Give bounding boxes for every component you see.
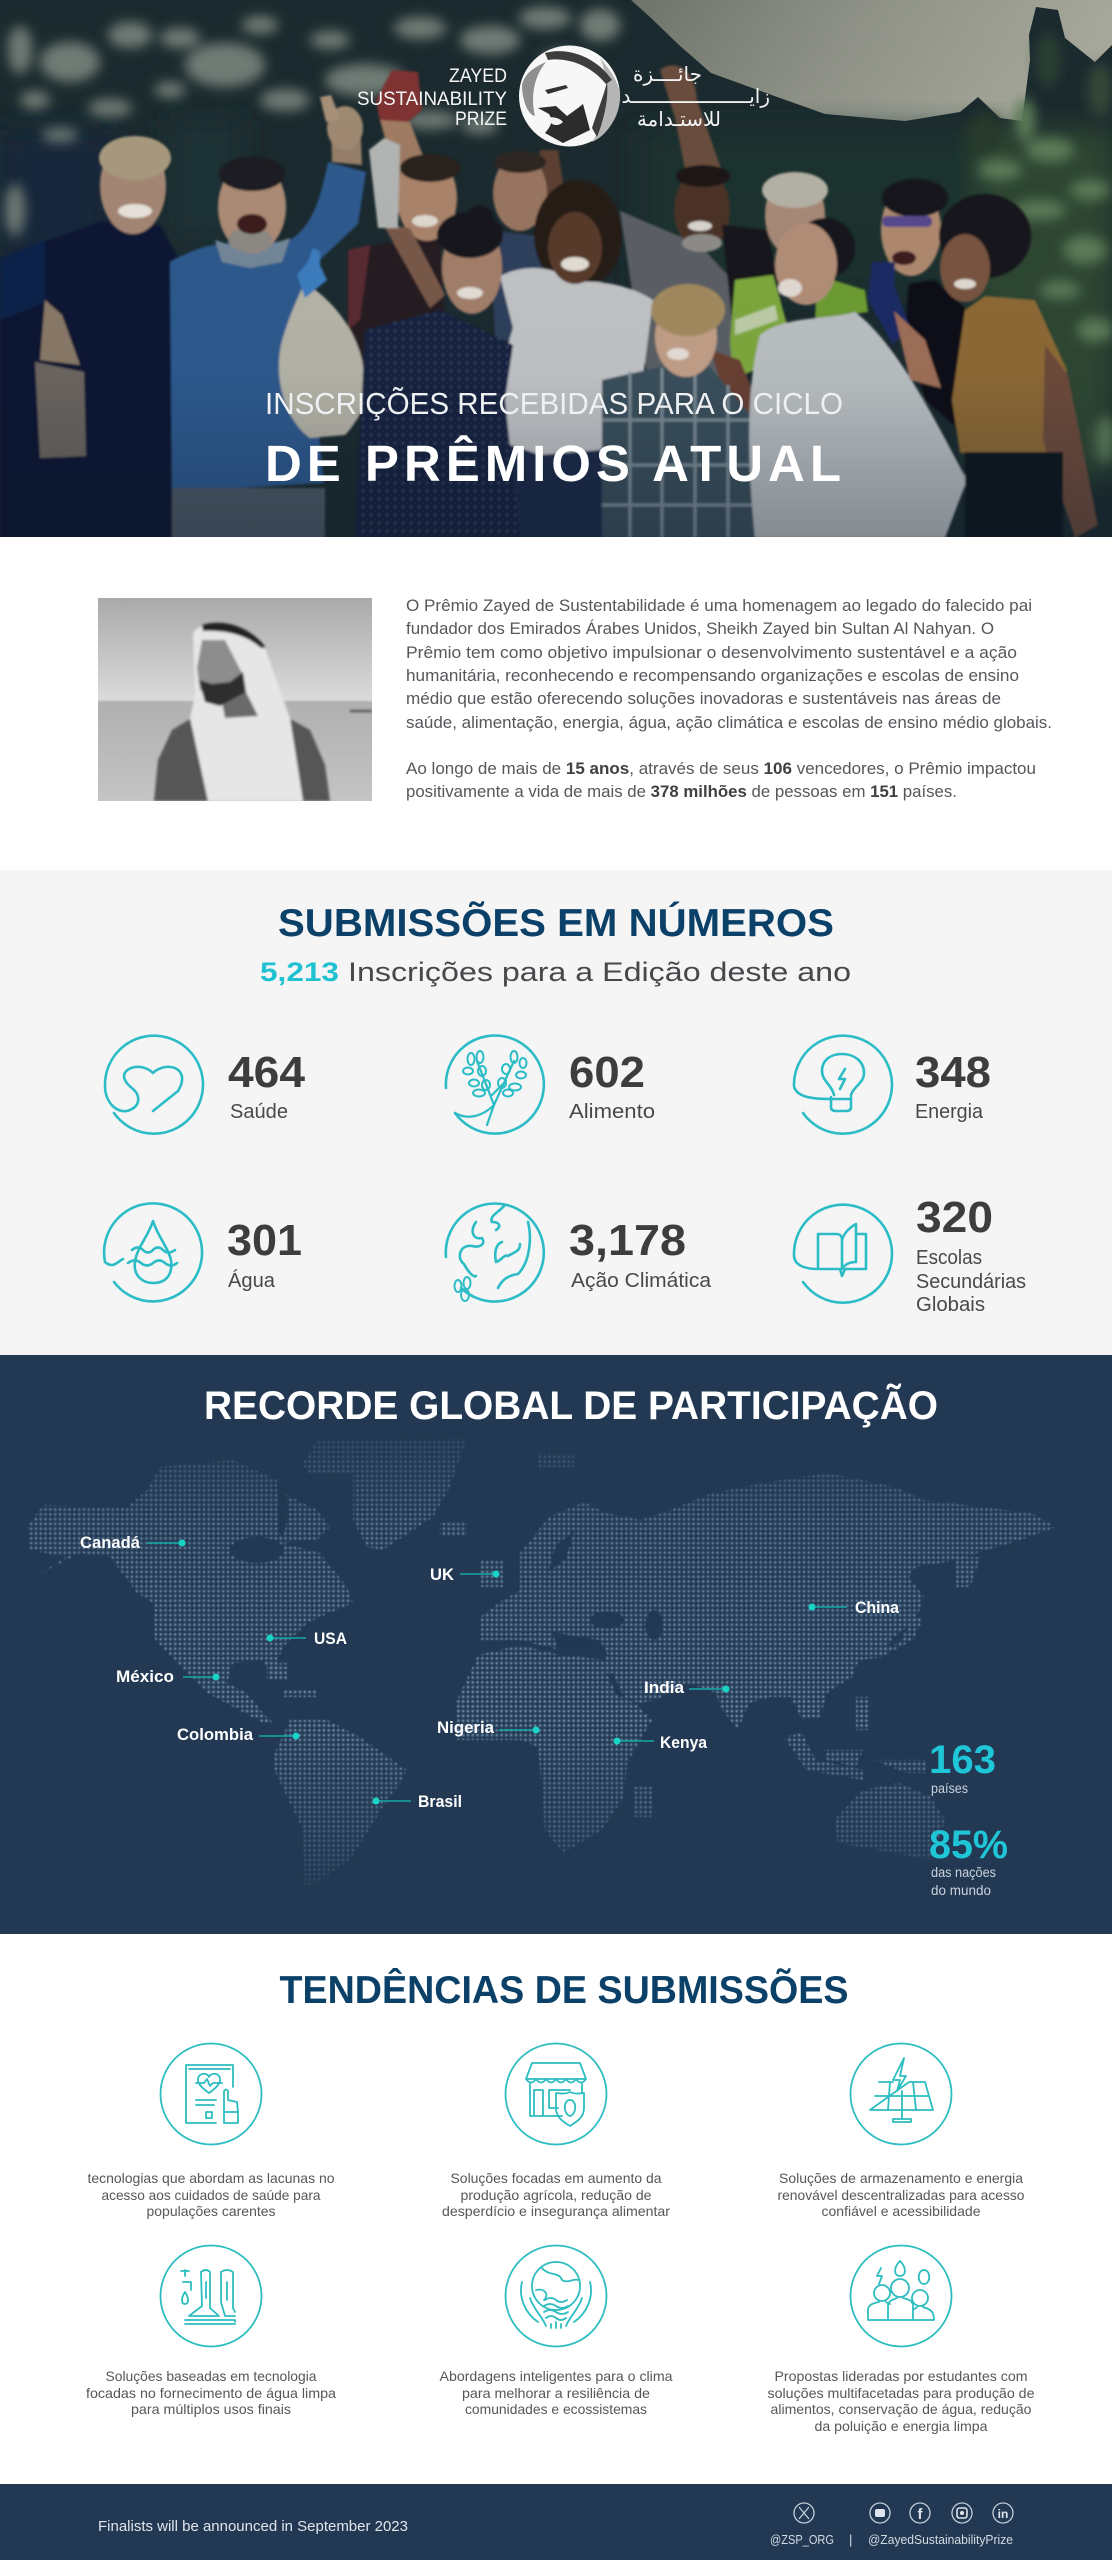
intro text	[406, 597, 1052, 801]
caption: Soluções de armazenamento e energia	[779, 2170, 1023, 2186]
woman laughing with bag	[749, 312, 967, 538]
caption: Soluções baseadas em tecnologia	[106, 2368, 317, 2384]
caption: acesso aos cuidados de saúde para	[102, 2187, 321, 2203]
heading: RECORDE GLOBAL DE PARTICIPAÇÃO	[204, 1382, 938, 1428]
social handles	[770, 2532, 1013, 2547]
intro text: saúde, alimentação, energia, água, ação climática e escolas de ensino médio globais.	[406, 714, 1052, 732]
icon: Facebook	[910, 2503, 930, 2523]
intro text: Prêmio tem como objetivo impulsionar o desenvolvimento sustentável e a ação	[406, 644, 1017, 662]
logo wordmark arabic: للاستـدامة	[637, 107, 721, 131]
trend: high schools	[768, 2246, 1035, 2434]
trend: health tech	[88, 2044, 335, 2219]
stat: 163 countries: 163	[929, 1738, 996, 1782]
stat: water: Água	[228, 1269, 276, 1292]
intro text: Ao longo de mais de 15 anos, através de seus 106 vencedores, o Prêmio impactou	[406, 760, 1036, 778]
icon: water drop	[104, 1203, 202, 1301]
stat: 85% of nations: do mundo	[931, 1883, 991, 1898]
hero title: INSCRIÇÕES RECEBIDAS PARA O CICLO	[265, 386, 843, 421]
logo portrait medallion	[519, 46, 620, 146]
country markers and labels: USA	[314, 1629, 347, 1648]
raised-arm men on the left	[906, 279, 966, 426]
subtitle total: Inscrições para a Edição deste ano	[348, 957, 851, 987]
logo wordmark arabic: زايــــــــــــــــــــد	[622, 84, 770, 108]
stat: climate action	[569, 1216, 712, 1292]
caption: para melhorar a resiliência de	[462, 2385, 650, 2401]
trend: clean water	[86, 2246, 336, 2417]
country markers and labels: Kenya	[660, 1733, 707, 1752]
icon: YouTube	[870, 2503, 890, 2523]
caption: populações carentes	[146, 2203, 276, 2219]
icon: LinkedIn: in	[998, 2507, 1008, 2521]
icon: climate globe	[446, 1204, 544, 1302]
stat: health: 464	[228, 1048, 306, 1097]
stat: energy: 348	[915, 1048, 991, 1097]
panel: submissions in numbers	[0, 870, 1112, 1356]
country markers and labels: India	[644, 1678, 685, 1697]
stat: global secondary schools	[916, 1193, 1026, 1316]
caption: soluções multifacetadas para produção de	[768, 2385, 1035, 2401]
caption	[778, 2170, 1025, 2219]
heading: submission trends: TENDÊNCIAS DE SUBMISSÕES	[280, 1968, 848, 2012]
intro text: humanitária, reconhecendo e recompensando organizações e escolas de ensino	[406, 667, 1019, 685]
caption	[440, 2368, 673, 2417]
stat: food: 602	[569, 1048, 645, 1097]
country markers and labels: México	[116, 1667, 174, 1686]
logo wordmark english	[357, 66, 507, 130]
caption: alimentos, conservação de água, redução	[770, 2401, 1032, 2417]
subtitle total: 5,213	[260, 957, 339, 987]
logo wordmark arabic: جائــــزة	[633, 62, 702, 86]
caption: focadas no fornecimento de água limpa	[86, 2385, 336, 2401]
icon: health heart	[105, 1036, 203, 1134]
logo: Zayed Sustainability Prize	[357, 46, 770, 146]
icon: tablet heart	[160, 2044, 262, 2144]
caption	[442, 2170, 670, 2219]
caption	[88, 2170, 335, 2219]
stat: climate action: 3,178	[569, 1216, 686, 1265]
intro text: O Prêmio Zayed de Sustentabilidade é uma homenagem ao legado do falecido pai	[406, 597, 1032, 615]
country markers and labels: Canadá	[80, 1533, 141, 1552]
woman in brown top	[939, 194, 1031, 278]
caption: Soluções focadas em aumento da	[450, 2170, 662, 2186]
intro text: médio que estão oferecendo soluções inovadoras e sustentáveis nas áreas de	[406, 690, 1001, 708]
intro text: positivamente a vida de mais de 378 milhões de pessoas em 151 países.	[406, 783, 957, 801]
icon: X	[794, 2503, 814, 2523]
caption: tecnologias que abordam as lacunas no	[88, 2170, 335, 2186]
logo wordmark english: SUSTAINABILITY	[357, 89, 507, 110]
stat: health	[228, 1048, 306, 1123]
icon: food wheat	[446, 1036, 544, 1134]
dotted world map	[27, 1438, 1056, 1890]
stat: food: Alimento	[569, 1101, 655, 1123]
country markers and labels: Nigeria	[437, 1718, 495, 1737]
logo wordmark english: ZAYED	[449, 66, 507, 87]
caption	[768, 2368, 1035, 2434]
icon: schools book	[794, 1205, 892, 1303]
background people	[659, 64, 722, 170]
icon: globe in hands	[506, 2246, 606, 2346]
stat: health: Saúde	[230, 1101, 288, 1123]
country markers and labels: China	[855, 1598, 899, 1617]
stat: global secondary schools: Secundárias	[916, 1271, 1026, 1293]
stat: energy: Energia	[915, 1101, 984, 1123]
trend: climate	[440, 2246, 673, 2417]
stat: global secondary schools: Escolas	[916, 1247, 982, 1269]
icon: Instagram	[952, 2503, 972, 2523]
icon: shop and shield	[506, 2044, 606, 2144]
country markers and labels: Colombia	[177, 1725, 254, 1744]
icon: three students	[850, 2246, 952, 2346]
social handles: |	[849, 2532, 852, 2547]
caption	[86, 2368, 336, 2417]
social handles: @ZSP_ORG	[770, 2532, 834, 2547]
stat: 163 countries: países	[931, 1781, 968, 1796]
caption: confiável e acessibilidade	[822, 2203, 981, 2219]
hero photo: group of people outdoors	[0, 0, 1112, 542]
boy in plaid shirt	[712, 351, 752, 414]
trend: energy storage	[778, 2044, 1025, 2219]
icon: LinkedIn	[993, 2503, 1013, 2523]
panel: global participation map	[0, 1355, 1112, 1934]
caption: renovável descentralizadas para acesso	[778, 2187, 1025, 2203]
stat: 85% of nations: das nações	[931, 1865, 996, 1880]
caption: da poluição e energia limpa	[814, 2418, 988, 2434]
stat: 85% of nations: 85%	[929, 1823, 1008, 1867]
caption: desperdício e insegurança alimentar	[442, 2203, 670, 2219]
caption: comunidades e ecossistemas	[465, 2401, 647, 2417]
stat: water	[227, 1216, 302, 1292]
logo wordmark english: PRIZE	[455, 109, 507, 130]
portrait of Sheikh Zayed	[98, 598, 372, 801]
icon: Facebook: f	[918, 2506, 924, 2523]
icon: energy bulb	[794, 1036, 892, 1134]
caption: Abordagens inteligentes para o clima	[440, 2368, 673, 2384]
icon: water filtration	[160, 2246, 262, 2346]
stat: global secondary schools: Globais	[916, 1294, 985, 1316]
social handles: @ZayedSustainabilityPrize	[868, 2532, 1013, 2547]
country markers and labels: UK	[430, 1565, 455, 1584]
stat: global secondary schools: 320	[916, 1193, 993, 1242]
trend: agriculture	[442, 2044, 670, 2219]
woman in white shirt	[510, 444, 603, 537]
country markers and labels	[80, 1533, 899, 1811]
caption: para múltiplos usos finais	[131, 2401, 291, 2417]
stat: climate action: Ação Climática	[571, 1270, 712, 1292]
icon: solar panel and bolt	[850, 2044, 952, 2144]
caption: Propostas lideradas por estudantes com	[774, 2368, 1028, 2384]
stat: 85% of nations	[929, 1823, 1008, 1898]
stat: food	[569, 1048, 655, 1123]
logo wordmark arabic	[622, 62, 770, 131]
hero title	[265, 386, 843, 492]
woman with short hair	[355, 310, 520, 538]
country markers and labels: Brasil	[418, 1792, 462, 1811]
intro text: fundador dos Emirados Árabes Unidos, Sheikh Zayed bin Sultan Al Nahyan. O	[406, 619, 994, 638]
stat: water: 301	[227, 1216, 302, 1265]
heading: SUBMISSÕES EM NÚMEROS	[278, 901, 834, 945]
footer	[0, 2484, 1112, 2560]
footer note: Finalists will be announced in September 2023	[98, 2518, 408, 2535]
stat: energy	[915, 1048, 991, 1123]
caption: produção agrícola, redução de	[460, 2187, 652, 2203]
hero title: DE PRÊMIOS ATUAL	[265, 434, 841, 492]
